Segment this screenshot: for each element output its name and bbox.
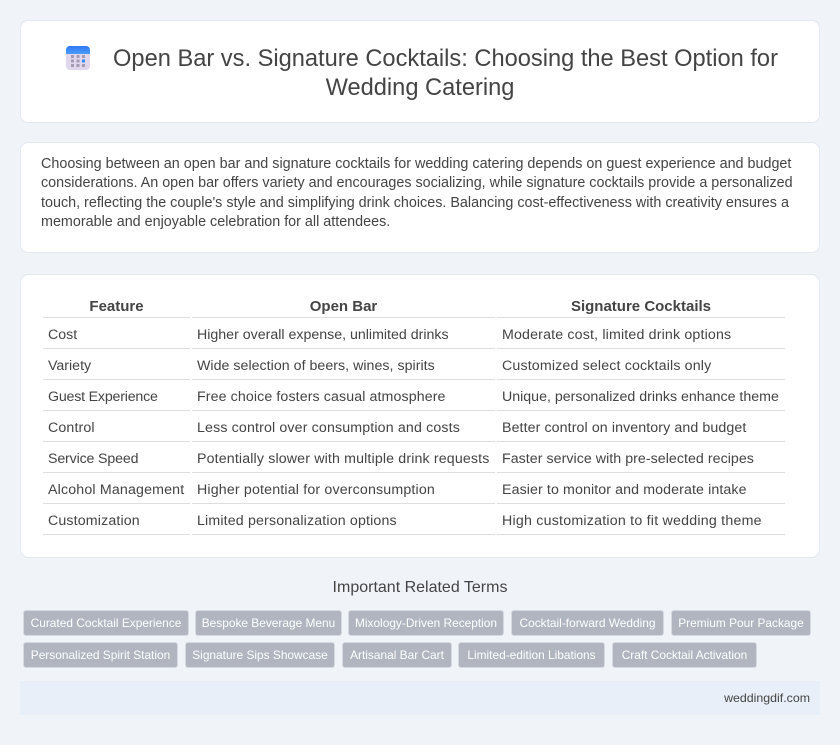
title: [113, 46, 778, 101]
row: variety: [48, 358, 712, 374]
row: guest experience: Guest Experience: [48, 389, 158, 405]
tag row 2: Personalized Spirit Station: [31, 648, 170, 662]
related terms tags: [23, 610, 811, 668]
icon: calendar: [66, 46, 90, 70]
row: control: [48, 420, 746, 436]
title: Open Bar vs. Signature Cocktails: Choosing the Best Option for: [113, 46, 778, 72]
row: variety: Variety: [48, 358, 91, 374]
row: alcohol management: Alcohol Management: [48, 482, 184, 498]
row: cost: Cost: [48, 327, 77, 343]
row: control: Less control over consumption and costs: [197, 420, 460, 436]
row: guest experience: Unique, personalized drinks enhance theme: [502, 389, 779, 405]
row: control: Better control on inventory and budget: [502, 420, 746, 436]
row: service speed: Faster service with pre-selected recipes: [502, 451, 754, 467]
footer bar: [20, 681, 820, 715]
row: service speed: [48, 451, 754, 467]
row: alcohol management: [48, 482, 747, 498]
row: customization: Limited personalization options: [197, 513, 397, 529]
tag row 1: Mixology-Driven Reception: [355, 616, 497, 630]
row: alcohol management: Higher potential for overconsumption: [197, 482, 435, 498]
row: guest experience: [48, 389, 779, 405]
row: service speed: Service Speed: [48, 451, 138, 467]
table header: [89, 298, 711, 315]
row: variety: Customized select cocktails only: [502, 358, 711, 374]
tag row 1: Bespoke Beverage Menu: [202, 616, 335, 630]
header card: [20, 20, 820, 123]
row: alcohol management: Easier to monitor and moderate intake: [502, 482, 747, 498]
footer source: weddingdif.com: [724, 691, 810, 705]
row: service speed: Potentially slower with multiple drink requests: [197, 451, 490, 467]
tag row 2: [23, 642, 757, 668]
table header: Signature Cocktails: [571, 298, 711, 315]
table card: [20, 274, 820, 558]
row: customization: Customization: [48, 513, 140, 529]
row: variety: Wide selection of beers, wines, spirits: [197, 358, 435, 374]
row: cost: Higher overall expense, unlimited drinks: [197, 327, 449, 343]
intro text: considerations. An open bar offers variety and encourages socializing, while signature cocktails provide a personalized: [41, 175, 793, 191]
row: cost: [48, 327, 731, 343]
intro card: [20, 142, 820, 253]
tag row 2: Signature Sips Showcase: [192, 648, 328, 662]
tag row 1: [23, 610, 811, 636]
tag row 1: Premium Pour Package: [678, 616, 804, 630]
comparison table: [43, 298, 785, 535]
tag row 2: Limited-edition Libations: [467, 648, 596, 662]
row: customization: [48, 513, 762, 529]
row: control: Control: [48, 420, 95, 436]
table header: Feature: [89, 298, 144, 315]
row: guest experience: Free choice fosters casual atmosphere: [197, 389, 446, 405]
intro text: [41, 156, 793, 230]
related terms heading: Important Related Terms: [333, 579, 507, 596]
intro text: memorable and enjoyable celebration for all attendees.: [41, 214, 390, 230]
tag row 2: Artisanal Bar Cart: [350, 648, 444, 662]
title: Wedding Catering: [326, 75, 514, 101]
tag row 1: Curated Cocktail Experience: [31, 616, 181, 630]
tag row 1: Cocktail-forward Wedding: [520, 616, 655, 630]
table header: Open Bar: [310, 298, 377, 315]
intro text: Choosing between an open bar and signature cocktails for wedding catering depends on guest experience and budget: [41, 156, 791, 172]
tag row 2: Craft Cocktail Activation: [622, 648, 747, 662]
row: customization: High customization to fit wedding theme: [502, 513, 762, 529]
row: cost: Moderate cost, limited drink options: [502, 327, 731, 343]
intro text: touch, reflecting the couple's style and simplifying drink choices. Balancing cost-effectiveness with creativity ensures a: [41, 195, 789, 211]
